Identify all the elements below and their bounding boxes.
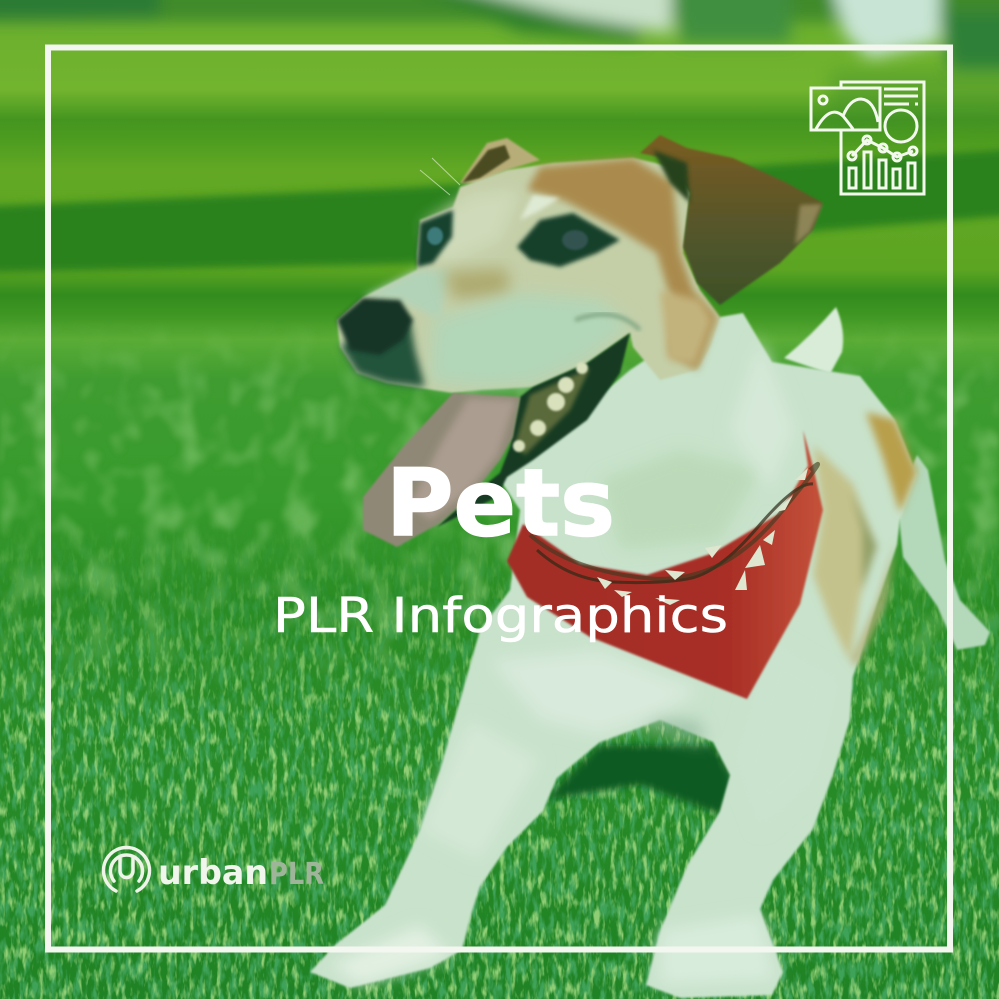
dog: gums — [515, 368, 590, 455]
background: sharp foreground grass — [0, 510, 999, 999]
icon: infographic page with chart — [811, 82, 924, 194]
dog: rear leg — [897, 455, 990, 650]
background: shadow right side — [830, 70, 999, 130]
logo mark — [104, 848, 150, 891]
dog: right eye — [517, 213, 620, 267]
dog: tongue — [363, 393, 520, 547]
dog: white blaze between eyes — [520, 195, 560, 220]
dog: muzzle — [430, 293, 630, 387]
title: Pets — [386, 449, 615, 557]
dog — [310, 135, 990, 998]
dog: teeth — [513, 362, 588, 452]
dog: left eye glint — [427, 227, 443, 245]
icon: pie circle — [885, 110, 917, 142]
dog: right ear inner fold — [653, 150, 690, 203]
dog: belly shadow on grass — [545, 745, 735, 815]
dog: mouth — [437, 333, 630, 527]
background: dark shadow band across lawn — [0, 148, 999, 273]
dog: mouth wrinkle — [575, 314, 640, 330]
dog: tail — [784, 307, 843, 374]
dog: right ear — [640, 135, 823, 305]
icon: page outline — [841, 82, 924, 194]
dog: chest fur shading — [330, 340, 840, 985]
logo wordmark: urban — [158, 853, 268, 893]
dog: bandana pattern — [530, 464, 818, 605]
dog: forehead pale fur — [425, 190, 520, 265]
dog: nose bridge — [363, 270, 450, 320]
dog: red bandana — [507, 430, 823, 699]
dog: left eye — [417, 210, 453, 267]
dog: whiskers — [420, 158, 460, 195]
dog: tongue highlight — [410, 398, 516, 520]
icon: bar chart — [849, 152, 915, 188]
icon: text lines — [884, 89, 918, 104]
dog: right eye glint — [562, 230, 588, 250]
dog: nose — [337, 298, 413, 355]
dog: head — [337, 158, 720, 393]
logo: urbanPLR — [104, 848, 324, 893]
dog: ear highlight — [795, 204, 822, 245]
dog: tan nose patch — [443, 268, 510, 300]
icon: picture with hills — [811, 88, 880, 130]
dog: left ear inner — [462, 145, 510, 183]
icon: line chart — [852, 140, 913, 157]
subtitle: PLR Infographics — [273, 588, 728, 644]
background: soft mid-ground grass — [0, 346, 999, 696]
logo PLR: PLR — [269, 857, 324, 892]
dog: left ear — [460, 138, 540, 183]
background: tree line and sky — [0, 0, 999, 70]
dog: tan patches on flank — [813, 412, 917, 668]
dog: dark lip — [340, 320, 425, 387]
dog: cheek fur — [660, 290, 712, 365]
dog: tan face markings — [527, 158, 717, 370]
dog: body and front legs — [310, 313, 917, 998]
